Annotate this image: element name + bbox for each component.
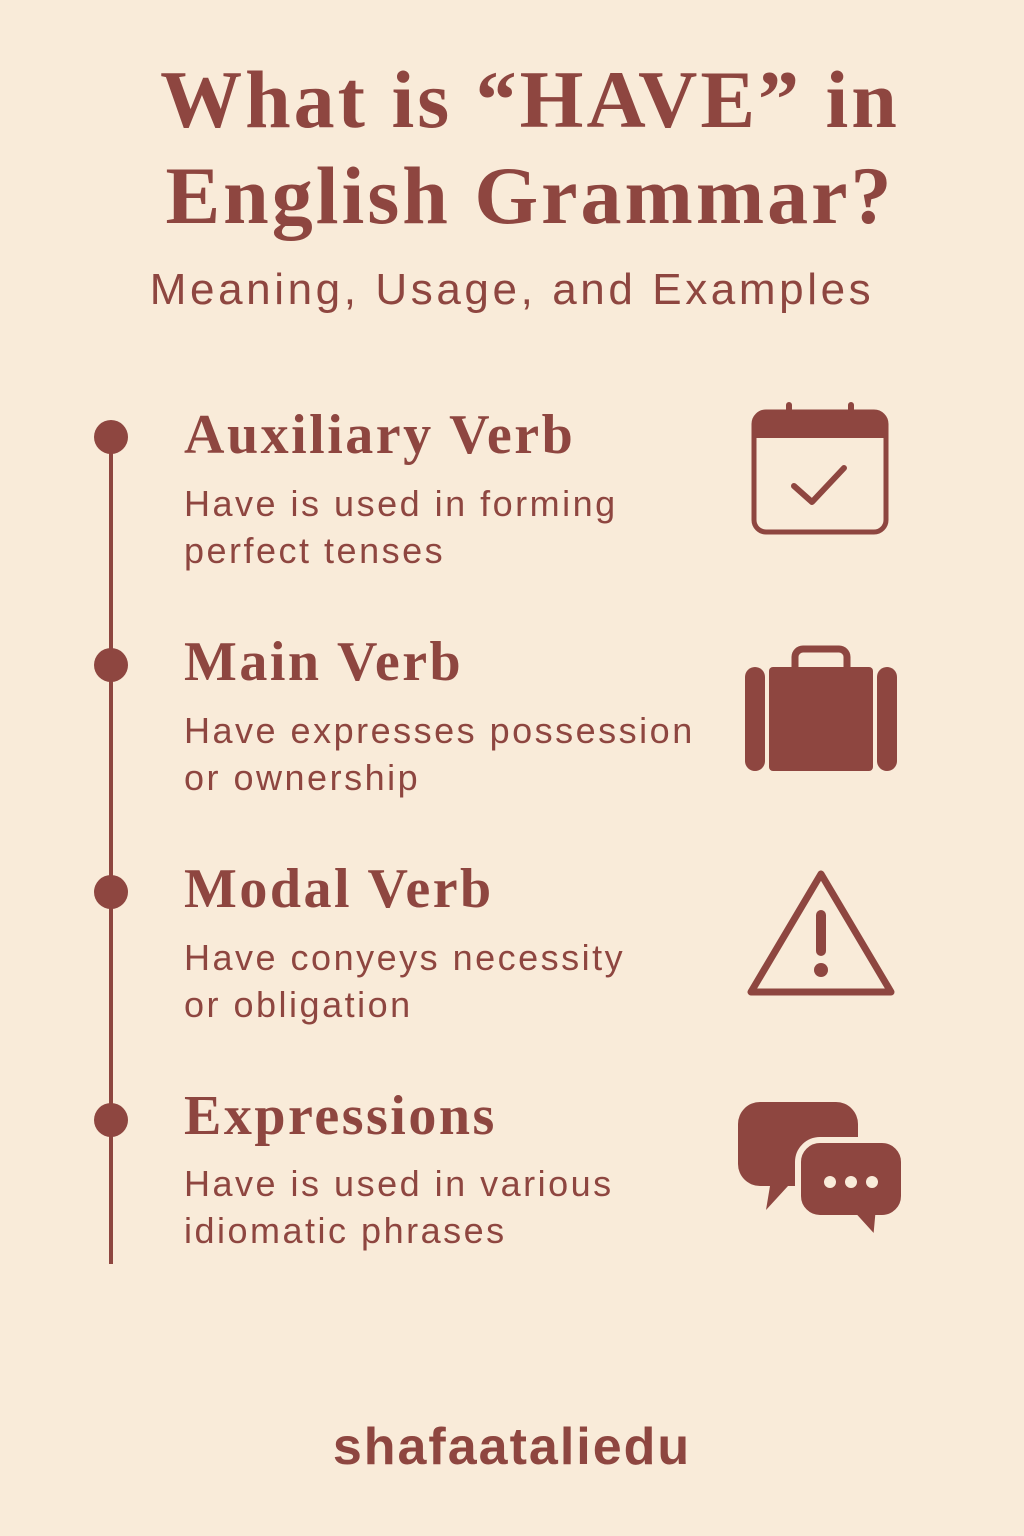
title: What is “HAVE” in	[160, 54, 900, 145]
text: expressions: Have is used in various	[184, 1163, 614, 1204]
heading: expressions: Expressions	[184, 1085, 497, 1147]
text: auxiliary	[184, 483, 618, 571]
title	[160, 54, 900, 241]
text: expressions: idiomatic phrases	[184, 1210, 507, 1251]
text: modal	[184, 937, 625, 1025]
text: modal: or obligation	[184, 984, 413, 1025]
timeline	[94, 420, 128, 1264]
text: auxiliary: Have is used in forming	[184, 483, 618, 524]
text: main	[184, 710, 695, 798]
heading: main: Main Verb	[184, 631, 463, 693]
icon: warning	[748, 870, 894, 996]
footer: shafaataliedu	[333, 1418, 691, 1476]
text: main: or ownership	[184, 757, 420, 798]
text: auxiliary: perfect tenses	[184, 530, 445, 571]
title: English Grammar?	[165, 150, 895, 241]
heading: modal: Modal Verb	[184, 858, 494, 920]
heading: auxiliary: Auxiliary Verb	[184, 404, 575, 466]
icon: chat	[738, 1102, 901, 1233]
text: modal: Have conyeys necessity	[184, 937, 625, 978]
icon: suitcase	[745, 646, 897, 771]
subtitle: Meaning, Usage, and Examples	[150, 265, 874, 314]
text: main: Have expresses possession	[184, 710, 695, 751]
text: expressions	[184, 1163, 614, 1251]
icon: calendar	[752, 402, 888, 534]
